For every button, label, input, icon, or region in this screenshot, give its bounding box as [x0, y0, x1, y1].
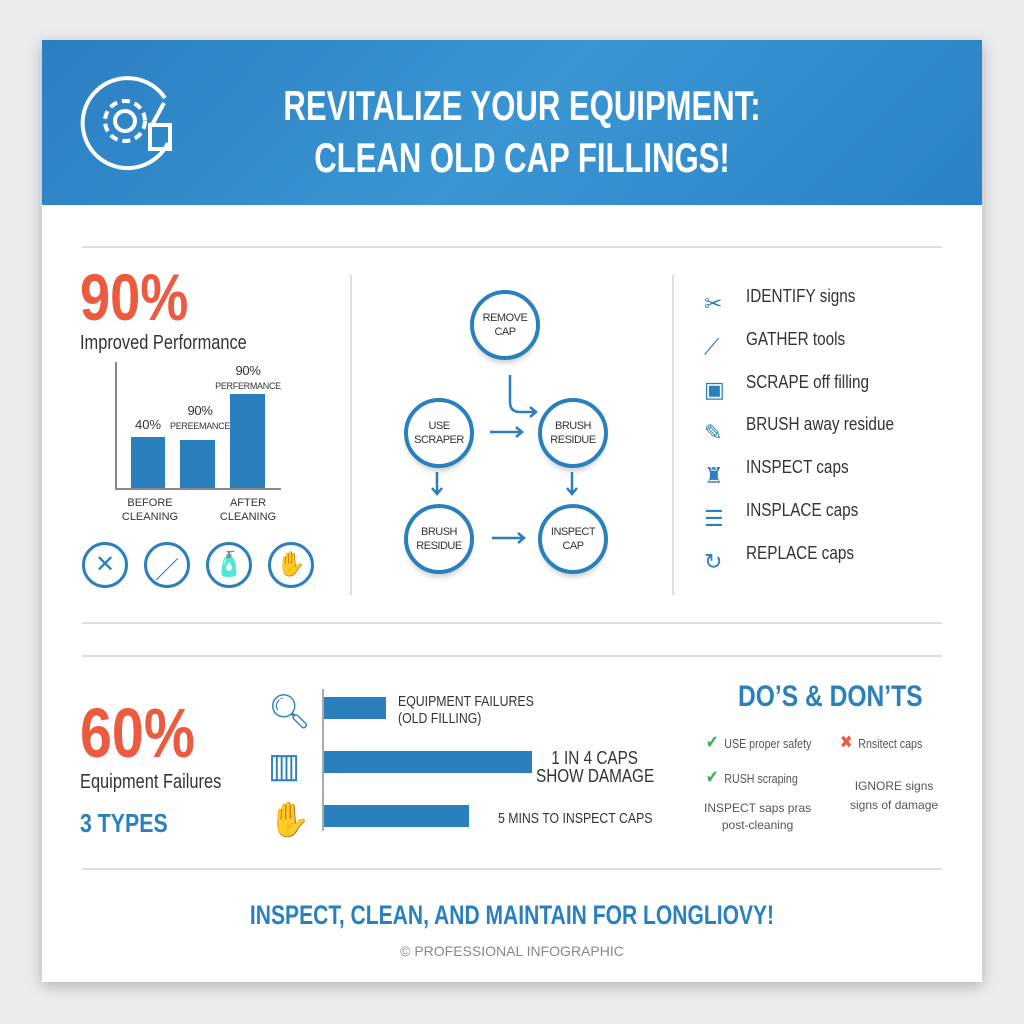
do's and don'ts: DO’S & DON’TS — [738, 680, 923, 713]
do's and don'ts: ✖ Rnsitect caps — [840, 732, 922, 752]
checklist: ♜ — [704, 463, 724, 488]
flow diagram: RESIDUE — [416, 540, 462, 552]
footer tagline: INSPECT, CLEAN, AND MAINTAIN FOR LONGLIOVY! — [250, 900, 774, 930]
checklist: ⟋ — [704, 334, 719, 359]
title: CLEAN OLD CAP FILLINGS! — [314, 134, 730, 181]
checklist: SCRAPE off filling — [746, 372, 869, 392]
horizontal bars — [268, 689, 654, 839]
horizontal bars: SHOW DAMAGE — [536, 766, 654, 786]
checklist: INSPECT caps — [746, 457, 849, 477]
do's and don'ts: ✔ USE proper safety — [706, 732, 811, 752]
bar chart — [115, 362, 281, 523]
bar chart: 90% — [187, 403, 213, 418]
stat: 90%: 90% — [80, 260, 188, 334]
stat: 60%: Equipment Failures — [80, 771, 221, 793]
flow diagram: USE — [428, 420, 450, 432]
icons row: ✋ — [276, 551, 306, 578]
flow diagram: SCRAPER — [414, 434, 464, 446]
flow diagram: CAP — [494, 326, 516, 338]
title: REVITALIZE YOUR EQUIPMENT: — [283, 82, 761, 129]
flow diagram: BRUSH — [555, 420, 591, 432]
do's and don'ts: post-cleaning — [722, 818, 793, 832]
stat: 60%: 60% — [80, 694, 195, 772]
checklist: ↻ — [704, 549, 722, 574]
checklist: IDENTIFY signs — [746, 286, 855, 306]
checklist: GATHER tools — [746, 329, 845, 349]
checklist — [704, 286, 894, 574]
bar chart: PEREEMANCE — [170, 421, 230, 431]
bar chart: AFTER — [230, 497, 266, 509]
checklist: ☰ — [704, 506, 724, 531]
flow diagram: INSPECT — [551, 526, 595, 538]
bar chart: CLEANING — [220, 511, 276, 523]
icons row: ✕ — [95, 551, 115, 578]
do's and don'ts — [704, 680, 938, 832]
horizontal bars: ▥ — [268, 747, 300, 785]
stat: 60%: 3 TYPES — [80, 808, 168, 838]
icons row: ／ — [155, 557, 179, 584]
flow diagram — [404, 290, 608, 580]
header banner — [42, 40, 982, 205]
bar chart: CLEANING — [122, 511, 178, 523]
checklist: ✂ — [704, 291, 722, 316]
horizontal bars: 🔍︎ — [268, 693, 311, 731]
stat: 60% — [80, 694, 221, 838]
icons row: 🧴 — [214, 551, 244, 578]
horizontal bars: 5 MINS TO INSPECT CAPS — [498, 810, 652, 827]
bar chart: PERFERMANCE — [215, 381, 281, 391]
horizontal bars: ✋ — [268, 801, 310, 839]
do's and don'ts: IGNORE signs — [855, 779, 933, 793]
horizontal bars: 1 IN 4 CAPS — [551, 748, 638, 768]
flow diagram: REMOVE — [483, 312, 527, 324]
bar chart: BEFORE — [127, 497, 173, 509]
checklist: REPLACE caps — [746, 543, 854, 563]
do's and don'ts: ✔ RUSH scraping — [706, 767, 798, 787]
flow diagram: BRUSH — [421, 526, 457, 538]
flow diagram: RESIDUE — [550, 434, 596, 446]
checklist: INSPLACE caps — [746, 500, 858, 520]
do's and don'ts: signs of damage — [850, 798, 938, 812]
bar chart: 40% — [135, 417, 161, 432]
stat: 90%: Improved Performance — [80, 332, 247, 354]
credit: © PROFESSIONAL INFOGRAPHIC — [400, 943, 624, 959]
checklist: BRUSH away residue — [746, 414, 894, 434]
checklist: ▣ — [704, 377, 725, 402]
do's and don'ts: INSPECT saps pras — [704, 801, 811, 815]
title — [283, 82, 761, 181]
checklist: ✎ — [704, 420, 722, 445]
flow diagram: CAP — [562, 540, 584, 552]
horizontal bars: (OLD FILLING) — [398, 710, 481, 727]
bar chart: 90% — [235, 363, 261, 378]
icons row — [82, 542, 314, 588]
horizontal bars: EQUIPMENT FAILURES — [398, 693, 534, 710]
icon: gear and brush — [80, 76, 172, 170]
stat: 90% — [80, 260, 247, 354]
